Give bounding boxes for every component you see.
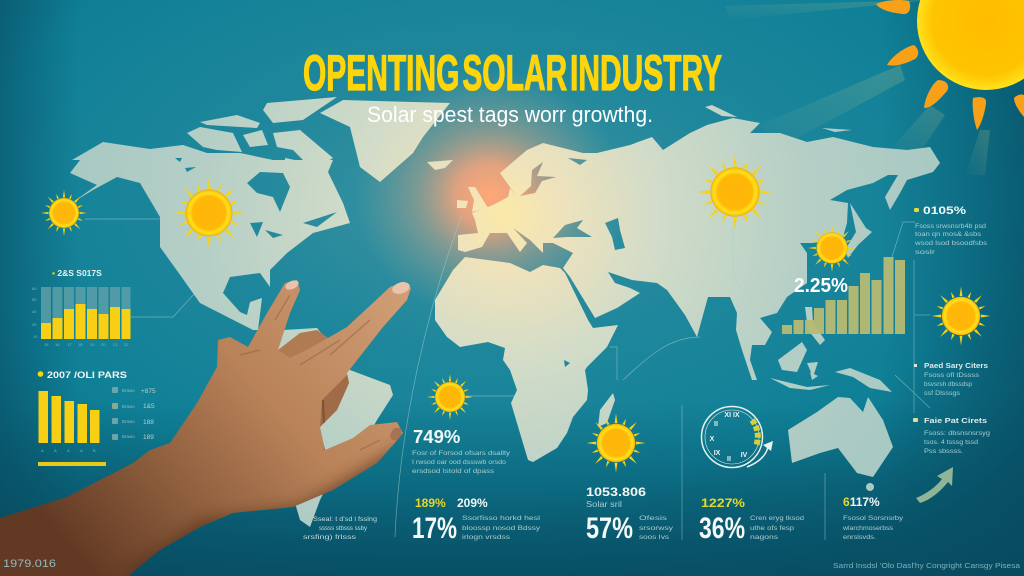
axis labels: 10 xyxy=(33,334,38,339)
japan xyxy=(845,203,872,258)
stat: 17%: 189% xyxy=(415,496,446,510)
legend: 1&5 xyxy=(143,403,155,410)
text block: Paed Sary Citers: ssf Dlsssgs xyxy=(924,391,960,397)
axis labels: A xyxy=(54,448,57,453)
sun beams xyxy=(725,0,990,175)
text block over south america: sssss stbsss ssby xyxy=(319,525,368,532)
legend: Brawo xyxy=(122,404,135,409)
hand pointing xyxy=(0,278,411,576)
icon: gauge: II xyxy=(727,456,731,463)
uk and ireland xyxy=(457,187,488,212)
stat: 6117%: 6117% xyxy=(843,495,880,509)
text block: Faie Pat Cirets: Faie Pat Cirets xyxy=(924,416,987,425)
stat: 57%: Ofesis xyxy=(639,515,668,522)
stat: 57%: srsorwsy xyxy=(639,525,674,532)
stat: 36%: 36% xyxy=(699,512,745,545)
text block: 0105%: toan qn mos& &sbs xyxy=(915,232,981,238)
bars values xyxy=(41,304,130,339)
stat: 749%: 749% xyxy=(413,426,460,447)
heading: ▪ 2&S S017S xyxy=(52,268,102,278)
stat: 36%: Cren eryg tksod xyxy=(750,515,804,522)
sun icon 7 xyxy=(587,414,645,472)
stat: 749%: Fosr of Forsod ofsars dsallty xyxy=(412,450,511,457)
stat: 17%: 17% xyxy=(412,512,457,545)
legend: +875 xyxy=(141,388,156,395)
panel: right bar chart xyxy=(782,257,905,334)
iceland xyxy=(427,160,453,170)
bars xyxy=(782,257,905,334)
stat: 57%: 1053.806 xyxy=(586,485,646,499)
stat: 749%: ersdsod Istold of dpass xyxy=(412,468,495,475)
stat: 6117%: Fsosol Sorsnsrby xyxy=(843,515,904,522)
axis labels: 15 xyxy=(44,342,49,347)
borneo and sulawesi xyxy=(778,342,818,377)
axis labels xyxy=(41,448,96,453)
axis labels: 50 xyxy=(32,297,37,302)
axis labels: 21 xyxy=(113,342,118,347)
underline xyxy=(38,462,106,466)
north america xyxy=(70,142,350,330)
philippines xyxy=(805,307,825,345)
stat: 36%: nagons xyxy=(750,534,779,541)
hand shading xyxy=(120,445,410,576)
axis labels: A xyxy=(80,448,83,453)
axis labels: 20 xyxy=(32,322,37,327)
stat: 36% xyxy=(699,496,804,545)
text block: 0105%: 0105% xyxy=(923,205,966,217)
axis labels xyxy=(32,286,129,347)
text block: 0105%: Fsoss srwsnsrb4b psd xyxy=(915,224,986,230)
new guinea xyxy=(835,368,892,392)
bars xyxy=(38,391,100,443)
icon: gauge: II xyxy=(714,421,718,428)
icon: gauge: X xyxy=(710,436,715,443)
legend: Brawo xyxy=(122,388,135,393)
stat: 17% xyxy=(412,496,541,545)
sun icon 3 xyxy=(697,154,773,230)
legend: Brawo xyxy=(122,434,135,439)
footer left: 1979.016 xyxy=(3,558,56,570)
icon: gauge xyxy=(702,406,773,468)
stat: 17%: irlogn vrsdss xyxy=(462,534,511,541)
text block: 0105% xyxy=(914,205,987,256)
text block: Faie Pat Cirets xyxy=(913,416,990,455)
footer right: Sarrd Insdsl 'Olo Dasl'hy Congright Cansgy Pisesa xyxy=(833,563,1020,570)
legend: 189 xyxy=(143,434,154,441)
stat: 57%: Solar sril xyxy=(586,500,622,509)
stat: 6117%: enrslsvds. xyxy=(843,534,876,541)
sun icon 4 xyxy=(808,224,856,272)
eurasia with inland seas xyxy=(458,118,940,380)
legend xyxy=(112,387,156,441)
panel: top left bar chart xyxy=(32,268,130,347)
south america xyxy=(270,328,393,527)
text block: Paed Sary Citers: Fsoss ofl tDssss xyxy=(924,373,979,379)
arctic islands xyxy=(187,97,337,170)
text block: Faie Pat Cirets: Pss sbssss. xyxy=(924,449,963,455)
text block over south america xyxy=(303,516,377,541)
axis labels: 40 xyxy=(32,309,37,314)
northern islands xyxy=(705,105,852,132)
icon: gauge: IX xyxy=(714,450,721,457)
stat: 17%: 209% xyxy=(457,496,488,510)
panel: second bar chart xyxy=(38,370,156,466)
stat: 36%: uthe ofs fesp xyxy=(750,525,794,532)
africa xyxy=(435,257,618,462)
panel: second bar chart: 2007 /OLI PARS xyxy=(47,370,127,381)
axis labels: 19 xyxy=(90,342,95,347)
axis labels: 18 xyxy=(78,342,83,347)
central glow xyxy=(355,70,625,320)
value: 2.25% xyxy=(794,275,848,297)
stat: 6117% xyxy=(842,495,904,541)
big sun top right xyxy=(876,0,1024,130)
stat: 57%: soos Ivs xyxy=(639,534,670,541)
icon: gauge: XI IX xyxy=(724,412,740,419)
stat: 57%: 57% xyxy=(586,512,633,545)
legend: Brawo xyxy=(122,419,135,424)
stat: 36%: 1227% xyxy=(701,496,745,510)
sumatra and java xyxy=(770,372,830,390)
title: OPENTING SOLAR INDUSTRY xyxy=(303,45,722,101)
madagascar xyxy=(598,393,615,427)
subtitle: Solar spest tags worr growthg. xyxy=(367,102,653,127)
text block: Faie Pat Cirets: Fsoss: dbsnsnsrsyg xyxy=(924,431,990,437)
sun icon 5 xyxy=(932,287,990,345)
axis labels: B xyxy=(93,448,96,453)
axis labels: A xyxy=(67,448,70,453)
tasmania xyxy=(866,483,874,491)
axis labels: 17 xyxy=(67,342,72,347)
text block: Faie Pat Cirets: tsos. 4 tsssg tssd xyxy=(924,440,978,446)
sun icon 1 xyxy=(41,190,87,236)
greenland xyxy=(320,100,450,182)
axis labels: 16 xyxy=(55,342,60,347)
sun icon 2 xyxy=(173,177,245,249)
sun icon 6 xyxy=(427,374,473,420)
stat: 749%: I rwsod oar ood dssswb orsdo xyxy=(412,459,506,466)
text block: Paed Sary Citers: Paed Sary Citers xyxy=(924,361,988,370)
legend: 188 xyxy=(143,419,154,426)
axis labels: 20 xyxy=(101,342,106,347)
world map xyxy=(70,97,940,527)
text block: 0105%: soslr xyxy=(915,250,935,256)
text block: 0105%: wsod lsod bsoodfsbs xyxy=(914,241,987,247)
axis labels: A xyxy=(41,448,44,453)
axis labels: 22 xyxy=(124,342,129,347)
text block over south america: Sseal: t d'sd l fsslng xyxy=(313,516,377,523)
arrow xyxy=(916,467,953,503)
connector lines xyxy=(85,215,930,540)
nails xyxy=(284,278,411,443)
text block: Paed Sary Citers xyxy=(914,361,988,397)
australia xyxy=(788,397,893,477)
text block: Paed Sary Citers: bsvsrsh dbssdsp xyxy=(924,382,973,388)
stat: 17%: Ssorfisso horkd hesl xyxy=(462,515,541,522)
stat: 749% xyxy=(412,426,511,475)
axis labels: 60 xyxy=(32,286,37,291)
heading xyxy=(38,371,43,377)
icon: gauge: IV xyxy=(741,452,748,459)
stat: 57% xyxy=(586,485,674,545)
stat: 17%: bloossp nosod Bdssy xyxy=(462,525,541,532)
stat: 6117%: wlarchmoserbss xyxy=(842,525,894,532)
bars background xyxy=(41,287,130,339)
text block over south america: srsfing) frlsss xyxy=(303,534,357,541)
